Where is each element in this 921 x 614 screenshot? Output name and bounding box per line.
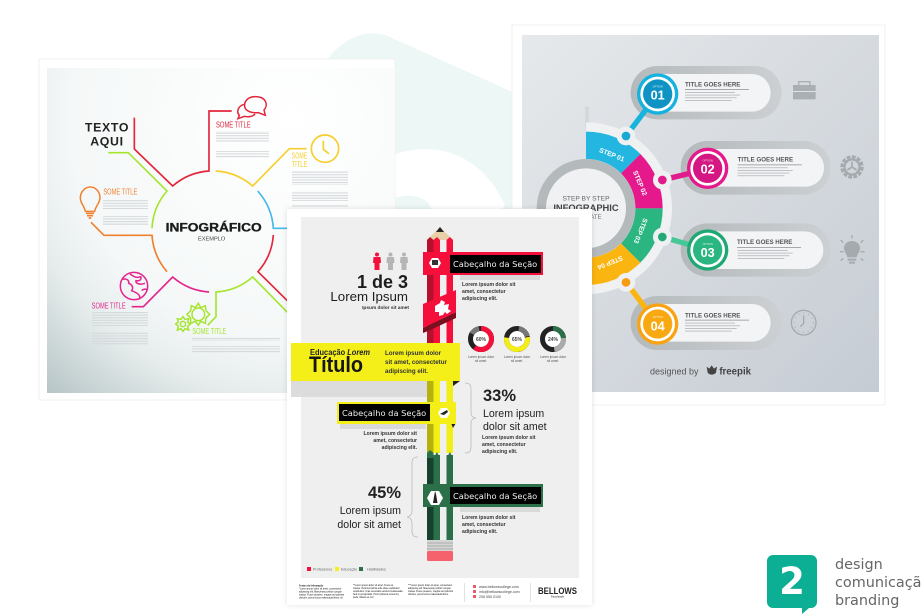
legend: Habilidades	[367, 568, 386, 572]
icon: gear	[843, 158, 861, 176]
panel: pencil infographic	[287, 209, 592, 605]
contact details: www.bellowscollege.com	[479, 585, 519, 589]
donut: 60%: sit amet.	[475, 359, 487, 363]
section header: yellow	[337, 402, 456, 429]
text block	[462, 515, 516, 535]
icon: clock	[311, 135, 339, 162]
text: texto aqui: TEXTO	[85, 121, 129, 135]
footer notes: ultricies, purus lectus malesuada libero.	[408, 593, 449, 596]
panel: circular infographic: AQUI	[90, 135, 124, 149]
icon: clock	[791, 310, 816, 335]
text block: Lorem ipsum dolor sit	[364, 431, 417, 437]
text block: amet, consectetur	[373, 438, 417, 444]
brand: bellows: BELLOWS	[538, 586, 577, 597]
donut: 65%: Lorem ipsum dolor	[504, 355, 531, 359]
stat: 45%: Lorem ipsum	[340, 505, 401, 517]
donut: 60%: Lorem ipsum dolor	[468, 355, 495, 359]
icon: light bulb	[80, 187, 100, 218]
section header: red	[423, 252, 543, 280]
step 01: 01	[651, 89, 665, 103]
connector lines and arcs	[91, 111, 307, 325]
icon: chat bubbles	[238, 97, 266, 119]
footer notes: adipiscing elit. Maecenas porttitor congue	[299, 590, 343, 594]
icon: globe	[120, 272, 148, 300]
bracket: right	[465, 383, 476, 453]
text: central title: INFOGRÁFICO	[166, 220, 262, 235]
step labels: STEP 03	[632, 217, 648, 244]
logo: 2 design comunicação branding	[767, 555, 921, 614]
step 02: OPTION	[703, 158, 713, 162]
section labels: SOME TITLE	[216, 121, 251, 130]
footer notes: massa. Fusce posuere, magna sed pulvinar	[408, 590, 453, 593]
donut: 24%: Lorem ipsum dolor	[540, 355, 567, 359]
text block: adipiscing elit.	[462, 529, 498, 535]
stat: 33%	[482, 387, 547, 455]
footer notes: Sed ut perspiciatis. Proin pharetra nonummy	[353, 593, 400, 596]
credit: designed by freepik	[650, 365, 752, 377]
text block	[462, 282, 516, 302]
step 02	[653, 141, 831, 195]
step labels: STEP 04	[596, 254, 624, 270]
yellow title banner	[291, 343, 460, 397]
step 04: 04	[651, 320, 665, 334]
text block: Lorem ipsum dolor sit	[462, 515, 516, 521]
stat: 1 de 3: Lorem Ipsum	[330, 289, 408, 304]
stat: 33%: dolor sit amet	[483, 421, 547, 433]
footer notes: **Lorem ipsum dolor sit amet. Fusce at	[353, 584, 393, 587]
icon: bulb	[840, 235, 865, 264]
logo: 2 design comunicação branding: 2	[779, 560, 805, 603]
section labels	[92, 121, 307, 336]
wheel centre text	[553, 196, 619, 221]
section header: red: Cabeçalho da Seção	[453, 259, 537, 269]
footer notes: adipiscing elit. Maecenas porttitor congue	[408, 587, 452, 590]
donut: 24%: sit amet.	[547, 359, 559, 363]
section header: yellow: Cabeçalho da Seção	[342, 408, 426, 418]
stat: 33%: Lorem ipsum	[483, 408, 544, 420]
section labels: SOME TITLE	[103, 187, 137, 196]
step 03: TITLE GOES HERE	[737, 239, 792, 246]
stat: 33%: amet, consectetur	[482, 442, 526, 448]
text block: adipiscing elit.	[382, 445, 418, 451]
step 02: 02	[701, 163, 715, 177]
bracket: left	[407, 457, 418, 537]
wheel centre text: STEP BY STEP	[562, 196, 610, 203]
step 01: TITLE GOES HERE	[685, 82, 740, 89]
yellow title banner: sit amet, consectetur	[385, 359, 447, 366]
wheel centre text: TEMPLATE	[570, 215, 602, 221]
text block: amet, consectetur	[462, 522, 506, 528]
footer notes: massa. Fusce posuere, magna sed pulvinar	[299, 594, 344, 596]
ribbon	[423, 290, 456, 333]
text block: Lorem ipsum dolor sit	[462, 282, 516, 288]
yellow title banner: Lorem ipsum dolor	[385, 350, 442, 357]
icon: briefcase	[793, 82, 816, 99]
credit: designed by freepik: designed by	[650, 366, 699, 376]
step 03: OPTION	[703, 242, 713, 246]
wheel centre text: INFOGRAPHIC	[553, 203, 619, 213]
footer notes	[299, 584, 453, 600]
people icons	[373, 252, 408, 270]
panel: step by step infographic	[500, 25, 885, 405]
stat: 33%: 33%	[483, 387, 516, 405]
footer notes: ultricies, purus lectus malesuada libero, sit	[299, 596, 343, 600]
text block: adipiscing elit.	[462, 296, 498, 302]
step 01	[617, 66, 782, 145]
section header: green: Cabeçalho da Seção	[453, 491, 537, 501]
step 03	[653, 223, 831, 277]
contact details: 208 555 0100	[479, 595, 501, 599]
donut: 60%	[467, 325, 495, 363]
step labels	[596, 147, 648, 270]
pencil	[427, 227, 453, 561]
semicircle wheel	[500, 107, 672, 294]
stat: 1 de 3	[330, 272, 409, 311]
panel: circular infographic	[39, 59, 395, 400]
stat: 33%: Lorem ipsum dolor sit	[482, 435, 536, 441]
yellow title banner: Educação Lorem	[310, 348, 370, 357]
brand: bellows: Faculdade	[551, 594, 564, 598]
stat: 45%	[337, 484, 401, 531]
step 01: OPTION	[653, 84, 663, 88]
stat: 1 de 3: 1 de 3	[357, 272, 408, 292]
donut: 60%: 60%	[476, 337, 487, 343]
stat: 45%: dolor sit amet	[337, 519, 401, 531]
contact details	[473, 585, 520, 599]
footer notes: *Lorem ipsum dolor sit amet, consectetur	[299, 588, 342, 590]
footer notes: massa. Vivamus lacinia odio vitae vestibulum	[353, 587, 400, 590]
section labels: SOME TITLE	[92, 302, 126, 311]
credit: designed by freepik: freepik	[719, 366, 752, 377]
text block: amet, consectetur	[462, 289, 506, 295]
step labels: STEP 01	[598, 147, 625, 164]
section labels: SOME	[292, 152, 307, 161]
legend: Professores	[313, 568, 332, 572]
yellow title banner: adipiscing elit.	[385, 368, 428, 375]
step 04: OPTION	[653, 315, 663, 319]
logo: 2 design comunicação branding: branding	[835, 593, 899, 609]
donut: 65%: sit amet.	[511, 359, 523, 363]
donut: 24%	[540, 328, 567, 363]
donut: 65%	[504, 327, 531, 363]
footer notes: pede. Mauris et orci.	[353, 596, 374, 599]
legend	[307, 567, 386, 572]
step 04: TITLE GOES HERE	[685, 312, 740, 319]
donut: 24%: 24%	[548, 337, 559, 343]
footer notes: ***Lorem ipsum dolor sit amet, consectetur	[408, 584, 452, 587]
step 04	[617, 273, 782, 350]
step 02: TITLE GOES HERE	[738, 157, 793, 164]
donut: 65%: 65%	[512, 337, 523, 343]
step labels: STEP 02	[631, 170, 648, 197]
logo: 2 design comunicação branding: design	[835, 557, 883, 573]
icon: gears	[176, 303, 210, 331]
legend: Educação	[341, 568, 357, 572]
section labels: SOME TITLE	[192, 327, 226, 336]
stat: 45%: 45%	[368, 484, 401, 502]
step 03: 03	[701, 246, 715, 260]
text block	[364, 431, 418, 451]
stat: 33%: adipiscing elit.	[482, 449, 518, 455]
yellow title banner: Título	[309, 352, 363, 377]
section labels: TITLE	[292, 160, 307, 169]
section header: green	[423, 484, 543, 512]
footer notes: Fontes de Informação	[299, 584, 324, 588]
stat: 1 de 3: Ipsum dolor sit amet	[362, 305, 409, 311]
footer notes: vestibulum. Cras venenatis euismod malesuada.	[353, 590, 403, 593]
panel: circular infographic: EXEMPLO	[198, 237, 226, 243]
contact details: info@bellowscollege.com	[479, 590, 520, 594]
background shape	[300, 33, 515, 230]
